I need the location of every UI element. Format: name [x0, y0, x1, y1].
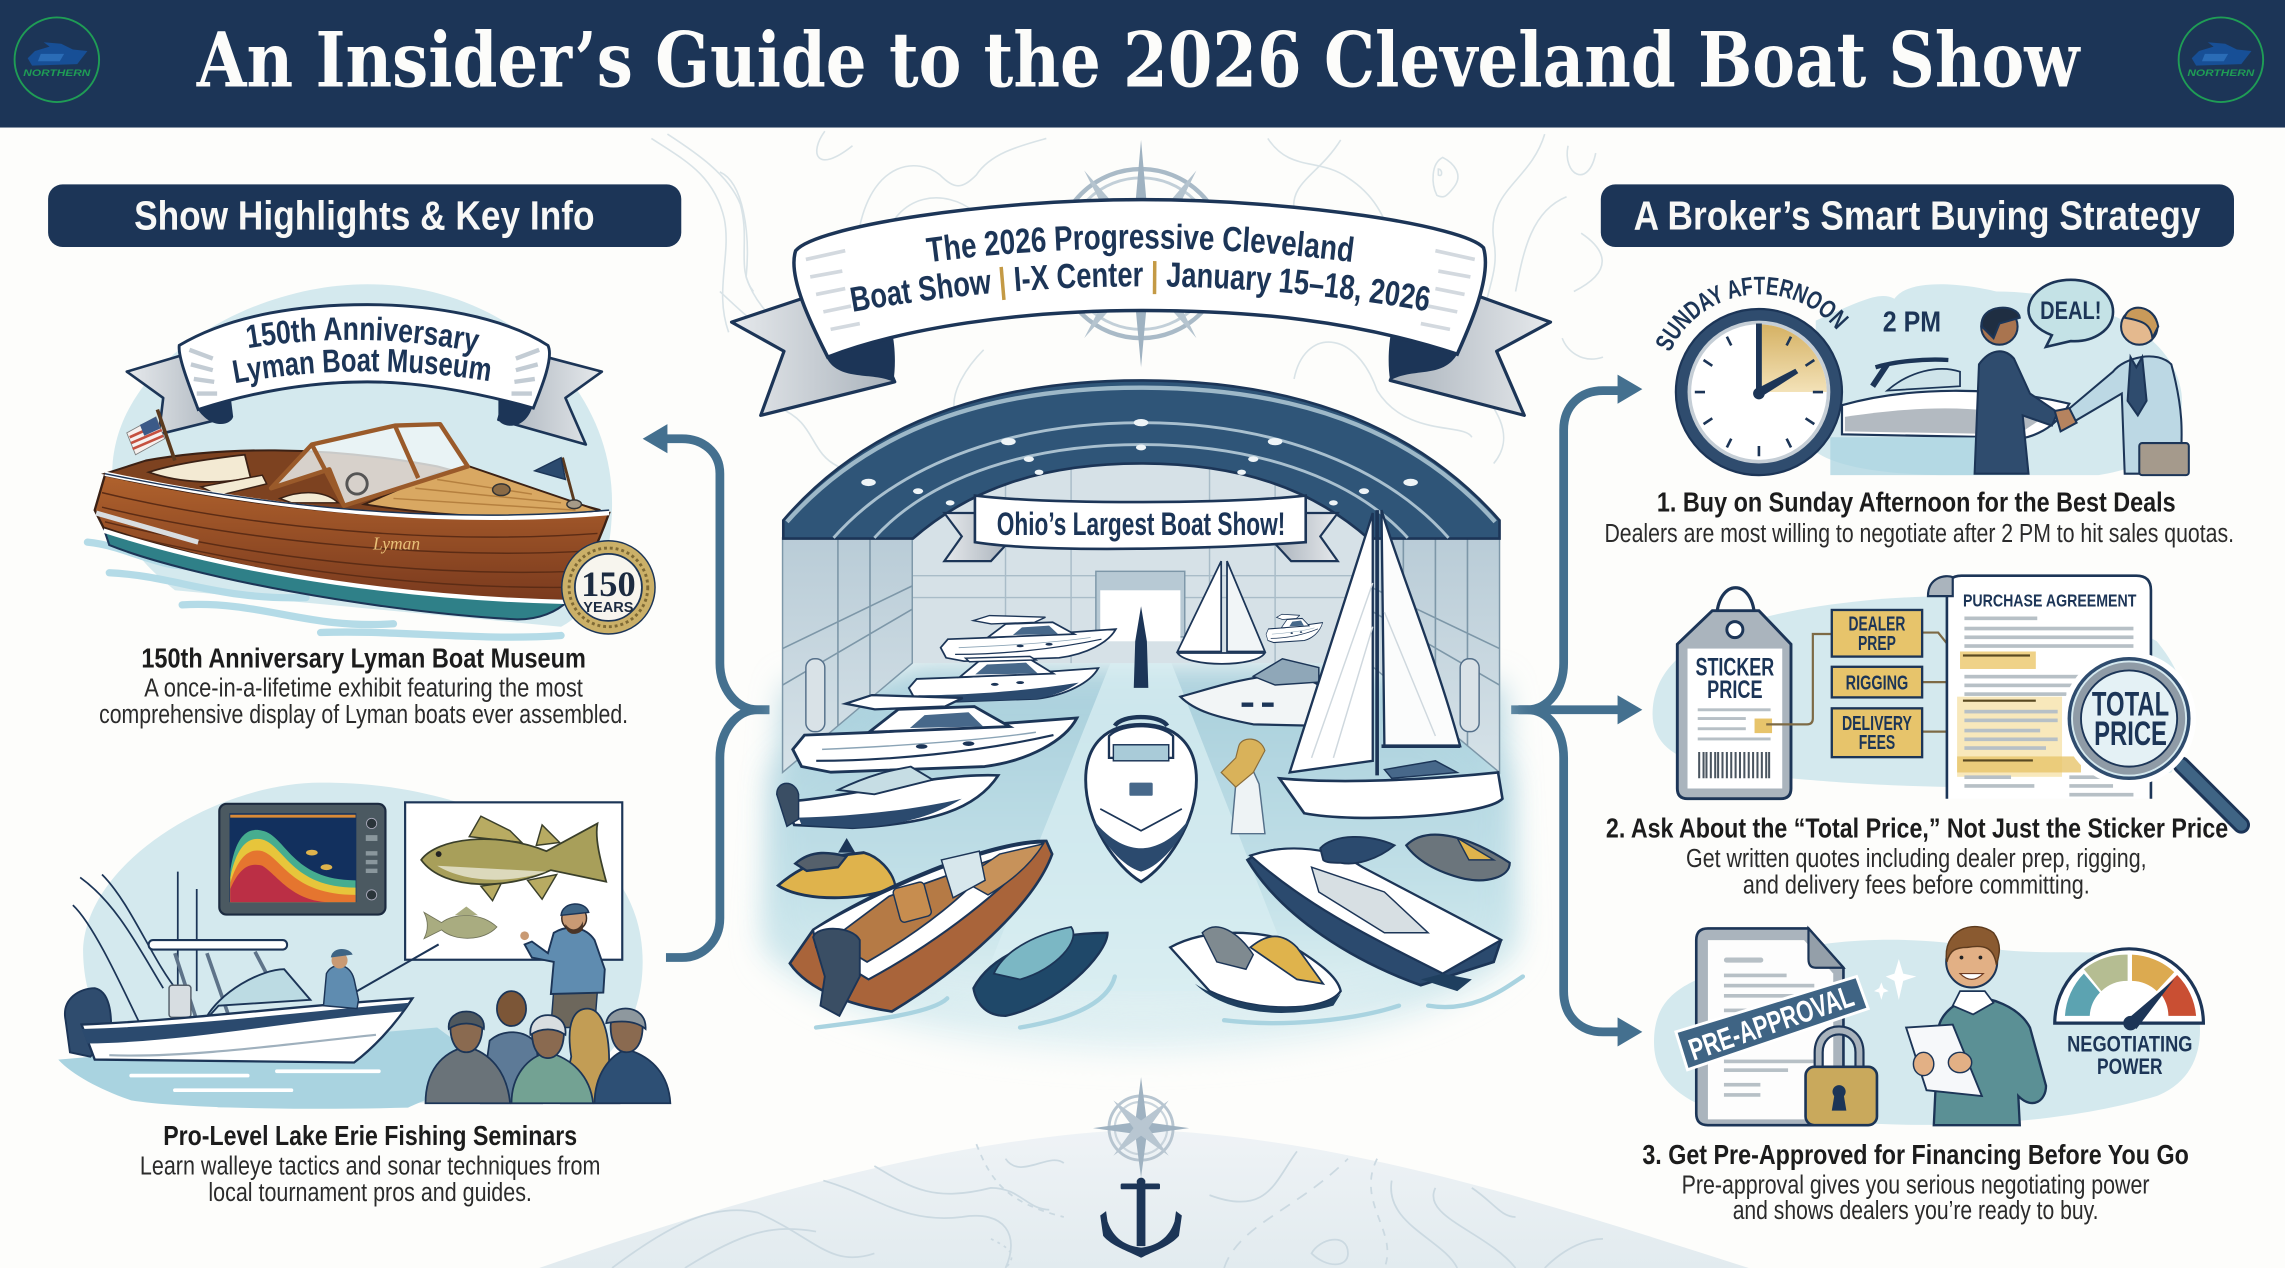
icon: magnifier: [2065, 654, 2241, 825]
text block: step 2: and delivery fees before committing.: [1743, 871, 2090, 899]
purchase agreement document: [1928, 576, 2151, 799]
text block: fishing seminars: [140, 1120, 600, 1207]
icon: walleye fish: [421, 816, 606, 901]
text block: step 3: 3. Get Pre-Approved for Financing Before You Go: [1642, 1139, 2189, 1170]
compass rose bottom: [1093, 1077, 1189, 1178]
fee boxes: RIGGING: [1846, 672, 1908, 694]
angler: [324, 965, 358, 1009]
small center person: [1134, 606, 1148, 688]
panel: fishing seminars illustration: [58, 783, 670, 1109]
back wall: [912, 463, 1368, 663]
arrow: to left panels: [643, 424, 769, 958]
jet ski: teal: [973, 927, 1108, 1016]
pre-approval stamp: [1676, 977, 1868, 1070]
text block: Lyman museum: comprehensive display of Lyman boats ever assembled.: [99, 701, 628, 729]
connector lines: [1766, 633, 1956, 732]
jet ski: yellow right: [1170, 927, 1341, 1013]
clock: [1676, 309, 1842, 475]
water reflections: [816, 977, 1523, 1028]
small banner ribbon: 150th Anniversary: [246, 316, 480, 357]
icon: sparkles: [1874, 959, 1916, 1000]
main banner: [730, 198, 1552, 417]
jet ski: yellow left: [778, 838, 895, 898]
icon: negotiating gauge: POWER: [2097, 1054, 2163, 1079]
text block: step 3: [1642, 1139, 2189, 1225]
step 2 illustration: total price: [1653, 576, 2241, 825]
logo: Northern right: NORTHERN: [2187, 68, 2255, 79]
woman visitor: [1221, 739, 1265, 834]
businessman right: [2055, 308, 2189, 475]
small banner ribbon: [125, 303, 604, 446]
bottom chart map: [539, 1130, 1749, 1268]
icon: negotiating gauge: NEGOTIATING: [2067, 1032, 2192, 1057]
fee boxes: DEALER: [1849, 613, 1906, 635]
text block: Lyman museum: A once-in-a-lifetime exhibit featuring the most: [144, 675, 583, 703]
step 3 illustration: pre-approval: [1654, 927, 2203, 1125]
heading pill: show highlights: Show Highlights & Key Info: [134, 193, 595, 239]
businessman left: [1975, 308, 2058, 474]
audience: [426, 991, 670, 1103]
text block: fishing seminars: local tournament pros and guides.: [208, 1179, 532, 1207]
smiling client: [1906, 927, 2046, 1125]
icon: sonar monitor: [219, 804, 385, 915]
boat: large sailboat: [1279, 510, 1502, 818]
panel: boat show hall: [765, 380, 1523, 1052]
icon: magnifier: PRICE: [2094, 715, 2167, 753]
logo: Northern left: NORTHERN: [23, 68, 91, 79]
aisle light rays: [979, 641, 1300, 991]
icon: padlock: [1806, 1030, 1877, 1125]
fee boxes: [1832, 610, 1922, 757]
text block: fishing seminars: Pro-Level Lake Erie Fishing Seminars: [163, 1120, 577, 1151]
fee boxes: PREP: [1858, 633, 1896, 655]
presenter: [520, 904, 605, 1028]
jet ski: grey: [1406, 835, 1510, 880]
icon: anchor: [1100, 1178, 1182, 1258]
main banner: Boat Show | I-X Center | January 15–18, 2026: [850, 261, 1430, 312]
purchase agreement document: PURCHASE AGREEMENT: [1963, 590, 2137, 610]
boat behind: [1830, 360, 2069, 475]
arrow: to right panels: [1511, 375, 1642, 1046]
header bar: [0, 0, 2285, 128]
text block: step 1: [1604, 487, 2234, 548]
fee boxes: FEES: [1859, 732, 1895, 754]
text block: step 2: [1606, 812, 2228, 899]
boat: navy bowrider: [1247, 837, 1501, 991]
text block: Lyman museum: [99, 643, 628, 729]
boat: center yacht bow: [1086, 717, 1196, 882]
side walls: [783, 538, 912, 772]
panel: Lyman boat museum illustration: [84, 284, 656, 641]
icon: small bass: [424, 907, 497, 939]
logo: Northern right: [2179, 17, 2263, 102]
water ripples: [87, 542, 561, 637]
Ohio's largest ribbon: [944, 496, 1338, 561]
fee boxes: DELIVERY: [1842, 713, 1912, 735]
icon: magnifier: TOTAL: [2092, 686, 2169, 724]
icon: American flag: [127, 410, 175, 461]
wooden Lyman boat: [95, 424, 609, 619]
boats: back rows: [793, 614, 1323, 772]
text block: step 3: Pre-approval gives you serious negotiating power: [1682, 1172, 2150, 1200]
fishing boat: [65, 872, 439, 1062]
speech bubble: Deal: DEAL!: [2040, 298, 2101, 325]
logo: Northern left: [15, 17, 99, 102]
loan document: [1696, 928, 1843, 1125]
text block: step 2: Get written quotes including dealer prep, rigging,: [1686, 845, 2147, 873]
boat: small center sailboat: [1177, 561, 1265, 664]
label: 2 PM: 2 PM: [1883, 307, 1941, 339]
hall floor: [765, 685, 1516, 1052]
icon: pennant: [535, 458, 581, 509]
water: [58, 1028, 481, 1109]
sticker tag: STICKER: [1696, 655, 1774, 682]
sticker tag: PRICE: [1707, 677, 1763, 704]
main banner: The 2026 Progressive Cleveland: [926, 224, 1354, 262]
boat: wooden bowrider: [790, 841, 1052, 1016]
background: nautical contour lines: [651, 131, 1603, 510]
badge: 150 years: 150: [581, 564, 636, 604]
small banner ribbon: Lyman Boat Museum: [232, 349, 490, 388]
text block: Lyman museum: 150th Anniversary Lyman Boat Museum: [141, 643, 586, 674]
ceiling lights: [861, 419, 1418, 505]
speech bubble: Deal: [2029, 280, 2113, 347]
heading pill: broker strategy: [1601, 184, 2234, 247]
pre-approval stamp: PRE-APPROVAL: [1685, 979, 1858, 1067]
boat: outboard runabout: [777, 767, 998, 828]
text block: step 3: and shows dealers you’re ready to buy.: [1733, 1197, 2098, 1225]
curved label: SUNDAY AFTERNOON: [1656, 276, 1849, 350]
wooden Lyman boat: Lyman: [372, 533, 420, 553]
icon: negotiating gauge: [2055, 949, 2203, 1079]
badge: 150 years: YEARS: [583, 600, 634, 616]
badge: 150 years: [562, 541, 655, 634]
heading pill: show highlights: [48, 184, 681, 247]
presentation board: [405, 802, 622, 960]
text block: step 1: 1. Buy on Sunday Afternoon for the Best Deals: [1657, 487, 2176, 518]
Ohio's largest ribbon: Ohio’s Largest Boat Show!: [997, 506, 1285, 542]
heading pill: broker strategy: A Broker’s Smart Buying Strategy: [1634, 193, 2201, 239]
text block: fishing seminars: Learn walleye tactics and sonar techniques from: [140, 1153, 600, 1181]
sticker tag: [1677, 588, 1791, 799]
boat: right cruiser: [1180, 659, 1320, 726]
step 1 illustration: Sunday afternoon: [1656, 276, 2190, 476]
compass rose top: [1057, 140, 1226, 367]
roof arch: [783, 380, 1500, 539]
